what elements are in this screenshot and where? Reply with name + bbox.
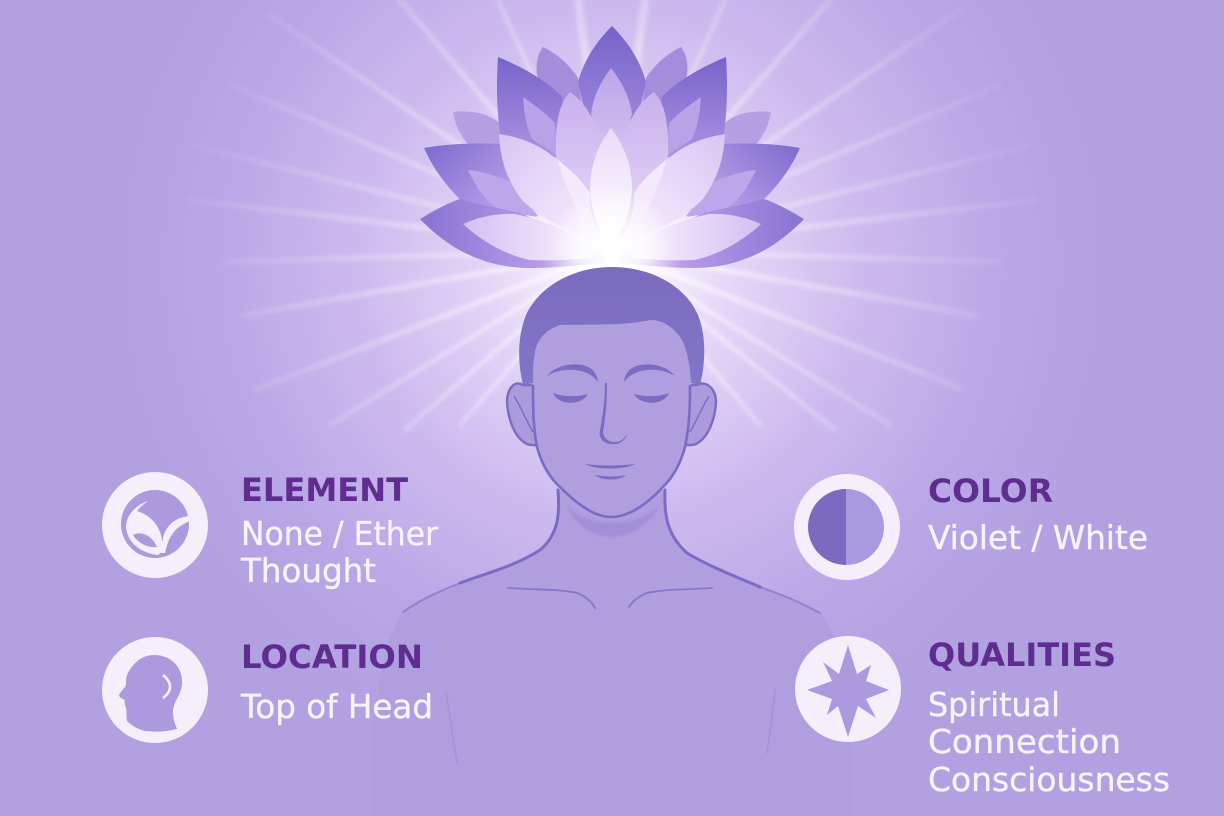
heading: qualities: QUALITIES bbox=[928, 636, 1116, 674]
panel: qualities bbox=[795, 636, 1170, 799]
face outline bbox=[533, 385, 690, 517]
panel: color bbox=[794, 472, 1148, 580]
body outline bbox=[403, 490, 820, 763]
icon: half violet half white circle bbox=[794, 474, 900, 580]
facial features bbox=[547, 364, 675, 480]
body bbox=[370, 490, 852, 816]
inner top petal bbox=[591, 68, 632, 170]
front petals: left bbox=[463, 92, 625, 260]
text: none / ether: None / Ether bbox=[241, 514, 438, 553]
front petals: right bbox=[599, 92, 761, 260]
light rays bbox=[190, 0, 1035, 430]
icon: eight-point star bbox=[795, 636, 901, 742]
text: connection: Connection bbox=[928, 722, 1121, 761]
heading: color: COLOR bbox=[928, 472, 1053, 510]
face bbox=[532, 310, 691, 517]
text: consciousness: Consciousness bbox=[928, 760, 1170, 799]
panel: element bbox=[102, 471, 438, 590]
neck shadow bbox=[566, 505, 660, 537]
lotus flower bbox=[420, 26, 804, 318]
top center petal bbox=[578, 26, 646, 170]
text: thought: Thought bbox=[240, 551, 376, 590]
heading: location: LOCATION bbox=[241, 638, 423, 676]
icon: head silhouette bbox=[102, 637, 208, 743]
lotus core light bbox=[546, 186, 678, 318]
hair bbox=[519, 267, 704, 385]
text: top of head: Top of Head bbox=[240, 687, 433, 726]
back petals: left bbox=[420, 47, 612, 268]
meditating figure bbox=[370, 267, 852, 816]
back petals: right bbox=[612, 47, 804, 268]
panel: location bbox=[102, 637, 433, 743]
text: violet / white: Violet / White bbox=[928, 518, 1148, 557]
center petal bbox=[590, 128, 632, 250]
icon: element leaf bbox=[102, 472, 208, 578]
ears bbox=[507, 384, 716, 445]
heading: element: ELEMENT bbox=[241, 471, 408, 509]
text: spiritual: Spiritual bbox=[928, 685, 1060, 724]
